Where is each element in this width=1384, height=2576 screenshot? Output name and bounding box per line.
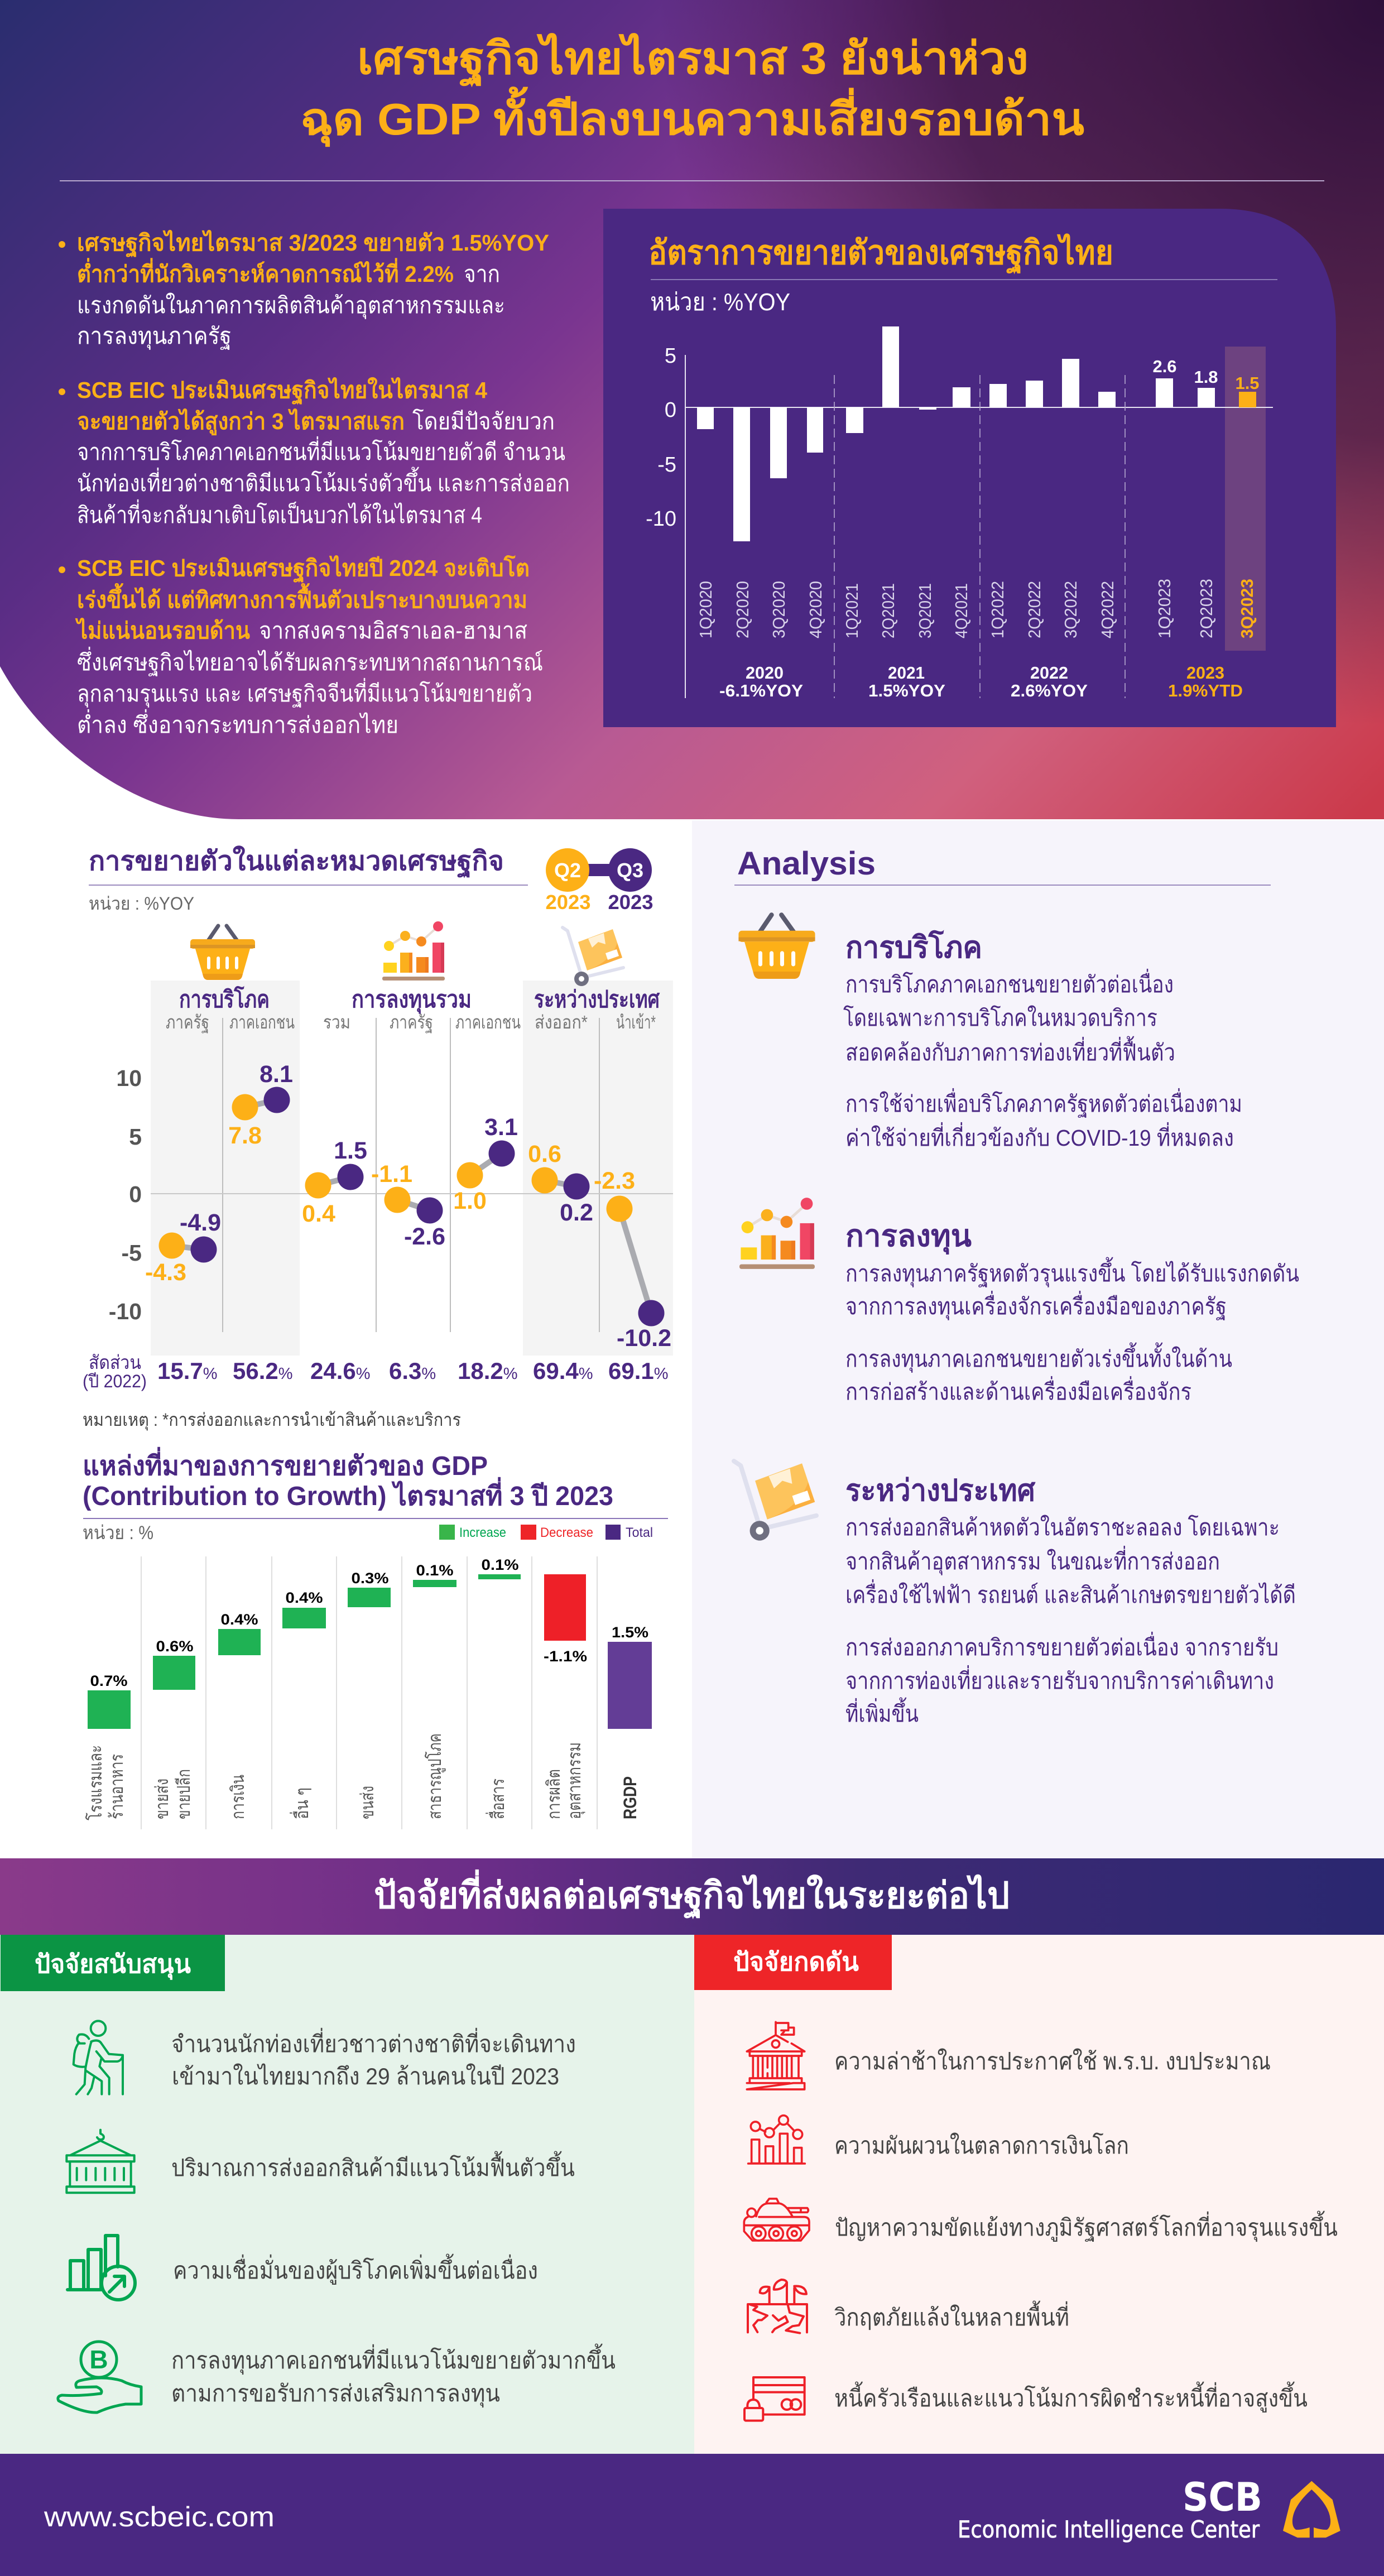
Q2 values (145, 1122, 635, 1286)
Q3 values: 3.1 (484, 1114, 518, 1141)
summary bullet 2: จากการบริโภคภาคเอกชนที่มีแนวโน้มขยายตัวดี จำนวน (77, 436, 565, 465)
analysis: international trade: ที่เพิ่มขึ้น (845, 1697, 919, 1727)
analysis: consumption: ค่าใช้จ่ายที่เกี่ยวข้องกับ COVID-19 ที่หมดลง (845, 1122, 1234, 1151)
factor text: private investment: ตามการขอรับการส่งเสริมการลงทุน (171, 2380, 500, 2408)
summary bullet 1 (59, 229, 549, 350)
icon: credit card (744, 2377, 805, 2421)
sector chart heading (89, 845, 528, 914)
quarter labels: 3Q2021 (915, 583, 935, 638)
quarter labels: 4Q2020 (806, 581, 825, 638)
analysis: consumption: โดยเฉพาะการบริโภคในหมวดบริการ (843, 1005, 1157, 1031)
waterfall category labels (85, 1733, 640, 1820)
y axis labels: 5 (129, 1124, 142, 1150)
legend: Q2 vs Q3: 2023 (546, 891, 590, 914)
y axis labels (109, 1065, 142, 1324)
share row: 24.6% (310, 1358, 371, 1384)
factor text: private investment: การลงทุนภาคเอกชนที่มีแนวโน้มขยายตัวมากขึ้น (171, 2343, 616, 2375)
Q3 dots (191, 1087, 664, 1326)
quarter labels: 1Q2022 (988, 581, 1007, 638)
summary bullet 1: การลงทุนภาครัฐ (77, 323, 232, 350)
factor text: exports: ปริมาณการส่งออกสินค้ามีแนวโน้มฟื้นตัวขึ้น (171, 2151, 575, 2181)
analysis: international trade: การส่งออกภาคบริการขยายตัวต่อเนื่อง จากรายรับ (845, 1632, 1279, 1660)
chart heading: อัตราการขยายตัวของเศรษฐกิจไทย (648, 233, 1113, 274)
waterfall values (90, 1556, 648, 1689)
waterfall values: 0.7% (90, 1673, 127, 1689)
y axis: 5 (665, 344, 676, 368)
year labels: 2021 (888, 663, 925, 683)
icon: investment chart (382, 921, 445, 981)
subcategory labels (166, 1012, 656, 1034)
factor text: markets: ความผันผวนในตลาดการเงินโลก (834, 2132, 1129, 2159)
analysis: investment: การก่อสร้างและด้านเครื่องมือเครื่องจักร (845, 1376, 1191, 1405)
waterfall category labels: โรงแรมและ (85, 1745, 105, 1820)
summary bullet 1: จาก (464, 261, 500, 287)
icon: trolley (563, 927, 623, 986)
quarter labels (696, 579, 1257, 638)
header gradient panel (0, 0, 1384, 819)
y axis labels: -5 (122, 1240, 142, 1266)
factor text: household debt: หนี้ครัวเรือนและแนวโน้มการผิดชำระหนี้ที่อาจสูงขึ้น (834, 2381, 1308, 2412)
waterfall category labels: อื่น ๆ (290, 1787, 312, 1819)
summary bullet 2: นักท่องเที่ยวต่างชาติมีแนวโน้มเร่งตัวขึ้น และการส่งออก (77, 467, 570, 496)
analysis: international trade (734, 1461, 1296, 1727)
Q3 values: -2.6 (404, 1223, 445, 1250)
waterfall values: -1.1% (544, 1648, 587, 1665)
legend: Q2 vs Q3: Q2 (554, 859, 581, 882)
analysis: consumption: การใช้จ่ายเพื่อบริโภคภาครัฐหดตัวต่อเนื่องตาม (845, 1088, 1242, 1118)
icon: hand with coin (58, 2342, 141, 2412)
summary bullet 1: เศรษฐกิจไทยไตรมาส 3/2023 ขยายตัว 1.5%YOY (77, 229, 549, 258)
bar value labels: 1.8 (1194, 367, 1218, 387)
sector chart heading: หน่วย : %YOY (89, 893, 194, 914)
analysis: consumption: การบริโภค (845, 930, 982, 964)
waterfall values: 0.6% (156, 1638, 193, 1655)
waterfall bars (88, 1574, 521, 1729)
Q3 values: 1.5 (334, 1137, 367, 1164)
share row: 69.4% (533, 1358, 593, 1384)
waterfall category labels: ขนส่ง (357, 1786, 377, 1819)
year labels: 1.9%YTD (1168, 681, 1243, 700)
analysis: international trade: การส่งออกสินค้าหดตัวในอัตราชะลอลง โดยเฉพาะ (845, 1515, 1280, 1540)
Q3 values (180, 1061, 671, 1352)
contribution chart legend: Decrease (540, 1525, 593, 1540)
Q2 values: 7.8 (228, 1122, 262, 1149)
contribution chart legend (439, 1525, 653, 1540)
analysis: investment: จากการลงทุนเครื่องจักรเครื่องมือของภาครัฐ (845, 1291, 1227, 1320)
tab: pressure (694, 1935, 892, 1990)
y axis (646, 344, 676, 531)
waterfall values: 0.4% (286, 1589, 323, 1606)
Q2 dots (158, 1094, 633, 1259)
analysis heading: Analysis (737, 845, 876, 882)
quarter labels: 1Q2020 (696, 581, 715, 638)
Q3 values: 8.1 (260, 1061, 293, 1088)
contribution chart legend: Total (626, 1525, 653, 1540)
factors band title (0, 1858, 1384, 1935)
quarter labels: 3Q2020 (769, 581, 789, 638)
summary bullet 2: โดยมีปัจจัยบวก (412, 408, 555, 434)
tab: supporting (1, 1935, 225, 1991)
contribution chart legend: Increase (459, 1525, 506, 1540)
factor text: confidence: ความเชื่อมั่นของผู้บริโภคเพิ่มขึ้นต่อเนื่อง (173, 2253, 538, 2285)
Q2 values: 0.6 (528, 1141, 561, 1167)
panel: supporting factors (0, 1935, 694, 2454)
waterfall category labels: ขายส่ง (152, 1779, 172, 1819)
waterfall values: 1.5% (612, 1624, 648, 1641)
bar value labels (1153, 357, 1259, 393)
share row: 6.3% (389, 1358, 436, 1384)
quarter labels: 4Q2021 (952, 583, 971, 638)
background: left column (0, 815, 692, 1864)
year labels: 2022 (1030, 663, 1068, 683)
icon: container (66, 2130, 134, 2193)
summary bullet 3: ต่ำลง ซึ่งอาจกระทบการส่งออกไทย (77, 709, 398, 738)
y axis: -5 (657, 453, 676, 477)
logo mark (1283, 2481, 1340, 2537)
year labels: 2023 (1186, 663, 1224, 683)
summary bullet 3: ลุกลามรุนแรง และ เศรษฐกิจจีนที่มีแนวโน้มขยายตัว (77, 678, 532, 708)
subcategory labels: นำเข้า* (616, 1012, 656, 1032)
background: analysis column (692, 820, 1384, 1864)
y axis labels: 0 (129, 1181, 142, 1207)
year labels: 2020 (746, 663, 784, 683)
waterfall category labels: สาธารณูปโภค (425, 1733, 446, 1819)
waterfall category labels: RGDP (620, 1776, 640, 1819)
share row: 15.7% (157, 1358, 218, 1384)
waterfall values: 0.3% (352, 1570, 388, 1587)
footer: Economic Intelligence Center (958, 2516, 1260, 2543)
quarter labels: 4Q2022 (1098, 581, 1117, 638)
quarter labels: 2Q2022 (1025, 581, 1044, 638)
quarter labels: 1Q2023 (1155, 579, 1174, 638)
y axis labels: -10 (109, 1299, 142, 1324)
footnote: หมายเหตุ : *การส่งออกและการนำเข้าสินค้าและบริการ (83, 1410, 461, 1431)
tab: pressure: ปัจจัยกดดัน (733, 1947, 859, 1976)
y axis labels: 10 (116, 1065, 142, 1091)
waterfall category labels: การผลิต (544, 1769, 564, 1819)
factor text: tourists: จำนวนนักท่องเที่ยวชาวต่างชาติที่จะเดินทาง (171, 2028, 576, 2057)
subcategory labels: ภาครัฐ (390, 1012, 433, 1034)
icon: drought (748, 2280, 807, 2333)
legend: Q2 vs Q3: Q3 (617, 859, 643, 882)
summary bullet 1: แรงกดดันในภาคการผลิตสินค้าอุตสาหกรรมและ (77, 292, 505, 319)
analysis: investment (739, 1198, 1299, 1405)
analysis: international trade: ระหว่างประเทศ (845, 1474, 1036, 1507)
bars (697, 326, 1215, 541)
legend: Q2 vs Q3: 2023 (608, 891, 653, 914)
panel: pressure factors (694, 1935, 1384, 2454)
share row: (ปี 2022) (83, 1371, 147, 1391)
category headings: การลงทุนรวม (352, 986, 472, 1014)
y axis: -10 (646, 507, 676, 531)
category headings: การบริโภค (179, 986, 270, 1012)
waterfall chart (85, 1556, 652, 1829)
summary bullet 3: ซึ่งเศรษฐกิจไทยอาจได้รับผลกระทบหากสถานการณ์ (77, 647, 543, 676)
factor text: tourists (171, 2028, 576, 2089)
contribution chart heading: (Contribution to Growth) ไตรมาสที่ 3 ปี 2023 (83, 1477, 613, 1511)
summary bullet 3: ไม่แน่นอนรอบด้าน (75, 617, 250, 643)
Q2 values: -1.1 (371, 1161, 412, 1188)
Q3 values: -10.2 (617, 1325, 671, 1352)
share row: สัดส่วน (89, 1352, 141, 1373)
summary bullet 3: SCB EIC ประเมินเศรษฐกิจไทยปี 2024 จะเติบโต (77, 555, 530, 583)
factor text: tourists: เข้ามาในไทยมากถึง 29 ล้านคนในปี 2023 (172, 2063, 559, 2089)
quarter labels: 2Q2023 (1196, 579, 1216, 638)
analysis: consumption: การบริโภคภาคเอกชนขยายตัวต่อเนื่อง (845, 969, 1174, 997)
y axis: 0 (665, 398, 676, 422)
category headings (179, 986, 660, 1014)
panel: analysis (734, 845, 1299, 1727)
title: ฉุด GDP ทั้งปีลงบนความเสี่ยงรอบด้าน (300, 86, 1084, 147)
quarter labels: 3Q2022 (1061, 581, 1080, 638)
legend: Q2 vs Q3 (546, 848, 653, 914)
waterfall category labels: อุตสาหกรรม (564, 1742, 585, 1819)
logo text: SCB (1183, 2474, 1262, 2520)
subcategory labels: ส่งออก* (535, 1012, 588, 1032)
Q2 values: 0.4 (302, 1200, 335, 1227)
panel: GDP growth chart (603, 209, 1336, 727)
share row: 69.1% (608, 1358, 669, 1384)
summary bullet 1: ต่ำกว่าที่นักวิเคราะห์คาดการณ์ไว้ที่ 2.2% (77, 258, 454, 287)
analysis: international trade: จากการท่องเที่ยวและรายรับจากบริการค่าเดินทาง (845, 1665, 1274, 1694)
Q2 values: 1.0 (453, 1188, 487, 1214)
icon: basket (190, 926, 255, 980)
year labels: 1.5%YOY (868, 681, 945, 700)
sector chart heading: การขยายตัวในแต่ละหมวดเศรษฐกิจ (89, 845, 504, 878)
waterfall category labels: ร้านอาหาร (107, 1754, 127, 1819)
waterfall values: 0.1% (416, 1562, 453, 1579)
factor text: private investment (171, 2343, 616, 2408)
chart unit: หน่วย : %YOY (650, 289, 790, 316)
year labels (719, 663, 1243, 700)
summary bullet 3 (59, 555, 543, 738)
factor text: drought: วิกฤตภัยแล้งในหลายพื้นที่ (834, 2300, 1069, 2330)
subcategory labels: ภาครัฐ (166, 1012, 209, 1034)
factors band title: ปัจจัยที่ส่งผลต่อเศรษฐกิจไทยในระยะต่อไป (374, 1869, 1010, 1919)
year labels: 2.6%YOY (1011, 681, 1088, 700)
Q2 values: -4.3 (145, 1259, 186, 1286)
icon: hand with coin: B (89, 2345, 108, 2374)
icon: hiker (74, 2021, 123, 2094)
tab: supporting: ปัจจัยสนับสนุน (35, 1949, 191, 1980)
title: เศรษฐกิจไทยไตรมาส 3 ยังน่าห่วง (357, 32, 1029, 88)
analysis: international trade: จากสินค้าอุตสาหกรรม ในขณะที่การส่งออก (845, 1546, 1220, 1575)
icon: financial chart (748, 2116, 805, 2164)
sector dumbbell chart (83, 921, 673, 1431)
summary bullet 2: สินค้าที่จะกลับมาเติบโตเป็นบวกได้ในไตรมาส 4 (77, 499, 482, 528)
summary bullet 3: เร่งขึ้นได้ แต่ทิศทางการฟื้นตัวเปราะบางบนความ (77, 583, 527, 613)
analysis: international trade: เครื่องใช้ไฟฟ้า รถยนต์ และสินค้าเกษตรขยายตัวได้ดี (845, 1579, 1296, 1608)
analysis: consumption (738, 915, 1242, 1151)
waterfall values: 0.1% (481, 1556, 519, 1573)
icon: growth bars (68, 2236, 135, 2300)
category headings: ระหว่างประเทศ (534, 986, 660, 1012)
factor text: budget delay: ความล่าช้าในการประกาศใช้ พ.ร.บ. งบประมาณ (834, 2048, 1271, 2074)
summary bullet 2: SCB EIC ประเมินเศรษฐกิจไทยในไตรมาส 4 (77, 377, 487, 405)
Q3 values: -4.9 (180, 1209, 221, 1236)
analysis: investment: การลงทุนภาครัฐหดตัวรุนแรงขึ้น โดยได้รับแรงกดดัน (845, 1257, 1299, 1287)
title (300, 32, 1084, 147)
contribution chart unit: หน่วย : % (83, 1522, 153, 1544)
footer (0, 2454, 1384, 2576)
Q3 values: 0.2 (560, 1199, 593, 1226)
subcategory labels: ภาคเอกชน (455, 1012, 521, 1032)
share row (83, 1352, 669, 1391)
highlight band for 3Q2023 (1225, 347, 1266, 651)
share row: 18.2% (458, 1358, 518, 1384)
bar value labels: 2.6 (1153, 357, 1176, 376)
year labels: -6.1%YOY (719, 681, 803, 700)
factor text: geopolitics: ปัญหาความขัดแย้งทางภูมิรัฐศาสตร์โลกที่อาจรุนแรงขึ้น (835, 2210, 1338, 2242)
quarter labels: 2Q2020 (733, 581, 752, 638)
subcategory labels: รวม (323, 1012, 350, 1032)
connectors (172, 1100, 651, 1313)
summary bullet 2: จะขยายตัวได้สูงกว่า 3 ไตรมาสแรก (77, 408, 405, 436)
analysis: investment: การลงทุน (845, 1219, 972, 1255)
waterfall category labels: การเงิน (228, 1775, 248, 1819)
icon: government building (747, 2022, 805, 2089)
quarter labels: 2Q2021 (878, 583, 898, 638)
quarter labels: 3Q2023 (1237, 579, 1257, 638)
waterfall values: 0.4% (221, 1611, 258, 1628)
bar value labels: 1.5 (1236, 373, 1259, 393)
analysis: investment: การลงทุนภาคเอกชนขยายตัวเร่งขึ้นทั้งในด้าน (845, 1342, 1232, 1373)
subcategory labels: ภาคเอกชน (229, 1012, 295, 1032)
analysis: consumption: สอดคล้องกับภาคการท่องเที่ยวที่ฟื้นตัว (845, 1036, 1175, 1065)
contribution chart heading (83, 1446, 613, 1511)
summary bullet 3: จากสงครามอิสราเอล-ฮามาส (259, 618, 527, 643)
quarter labels: 1Q2021 (842, 583, 862, 638)
website: www.scbeic.com (44, 2501, 275, 2532)
waterfall category labels: สื่อสาร (486, 1779, 508, 1819)
contribution chart heading: แหล่งที่มาของการขยายตัวของ GDP (83, 1446, 488, 1481)
waterfall category labels: ขายปลีก (174, 1769, 194, 1819)
Q2 values: -2.3 (594, 1167, 635, 1194)
share row: 56.2% (233, 1358, 293, 1384)
icon: tank (744, 2199, 809, 2241)
summary bullet 2 (59, 377, 570, 528)
